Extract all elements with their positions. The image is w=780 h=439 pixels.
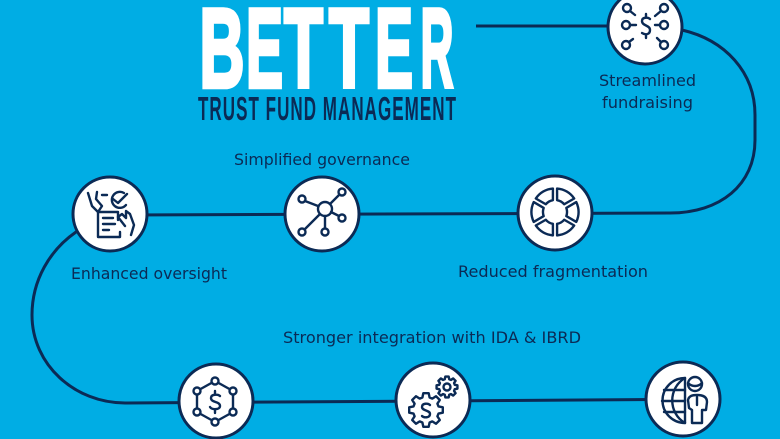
icon: globe and person	[646, 362, 720, 436]
label: streamlined fundraising	[599, 71, 696, 112]
icon: gears with dollar	[396, 363, 470, 437]
label: reduced fragmentation: Reduced fragmentation	[458, 262, 648, 281]
label: enhanced oversight: Enhanced oversight	[71, 264, 227, 283]
icon: dollar network	[179, 364, 253, 438]
label: streamlined fundraising: Streamlined	[599, 71, 696, 90]
label: stronger integration: Stronger integration with IDA & IBRD	[283, 328, 581, 347]
icon: enhanced oversight	[73, 177, 147, 251]
label: streamlined fundraising: fundraising	[602, 93, 693, 112]
connector path	[32, 26, 755, 403]
icon: reduced fragmentation	[518, 176, 592, 250]
subtitle: Trust Fund Management: TRUST FUND MANAGEMENT	[198, 90, 457, 127]
icon: simplified governance	[285, 177, 359, 251]
title: Better	[200, 0, 454, 111]
label: simplified governance: Simplified governance	[234, 150, 410, 169]
icon: streamlined fundraising	[608, 0, 682, 64]
